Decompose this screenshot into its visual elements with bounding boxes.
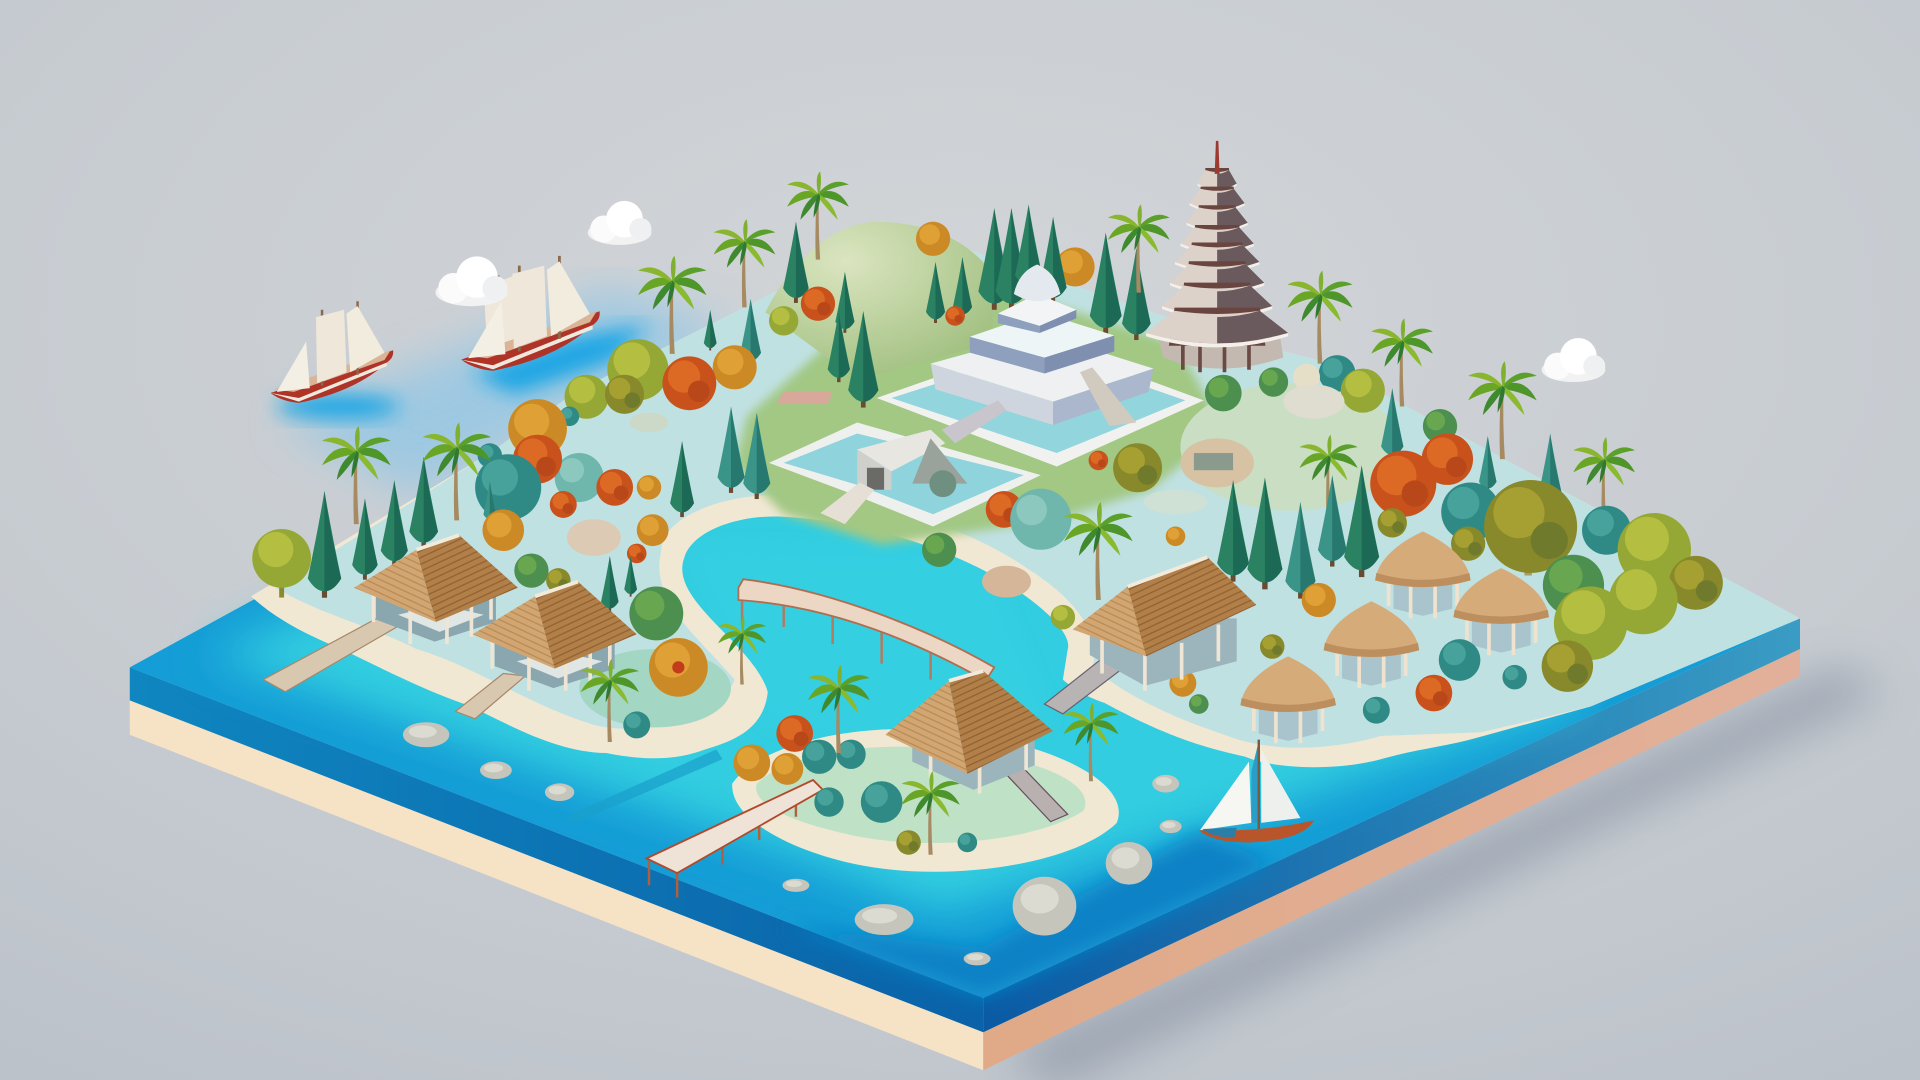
bright sea under ships (277, 324, 649, 419)
pale sea haze behind ships (282, 288, 735, 496)
main land sand (251, 220, 1800, 767)
main land pale ground (276, 220, 1800, 748)
coral rocks in water (403, 722, 1182, 965)
small ground plants near round huts (1051, 583, 1527, 724)
center islet (732, 729, 1119, 872)
right hill details and temple-side shrubs (922, 355, 1561, 598)
platform sand layer (130, 649, 1800, 1070)
mid trees and shrubs left (252, 311, 878, 640)
main white temple (877, 264, 1204, 467)
long pier (647, 780, 823, 898)
deep water at front corner (784, 833, 1273, 998)
clouds (435, 201, 1605, 382)
foreground palms and shrubs (581, 616, 1118, 855)
turquoise shallows (208, 429, 1592, 912)
bright lagoon (686, 545, 1053, 747)
round thatched huts (1240, 531, 1549, 743)
arched boardwalk over lagoon (738, 579, 994, 693)
back trees and palms (638, 171, 1635, 525)
right hill (1180, 383, 1401, 511)
pines and trees right (1064, 465, 1723, 692)
platform shadow (1004, 667, 1886, 1080)
water surface (130, 404, 1800, 998)
sailing ship left (271, 301, 393, 403)
right beach docks (994, 653, 1124, 822)
platform water side (130, 618, 1800, 1032)
main hill (765, 222, 994, 380)
large thatched huts (354, 535, 1256, 793)
sailing ship right (461, 256, 600, 371)
teal ground on left point (579, 649, 731, 727)
small sailboat (1199, 740, 1314, 842)
lower pool and small temple (769, 392, 1041, 527)
submerged channel streak (566, 749, 722, 823)
green meadow around temples (735, 282, 1224, 545)
left beach docks (263, 612, 525, 719)
pagoda tower (1146, 141, 1288, 372)
